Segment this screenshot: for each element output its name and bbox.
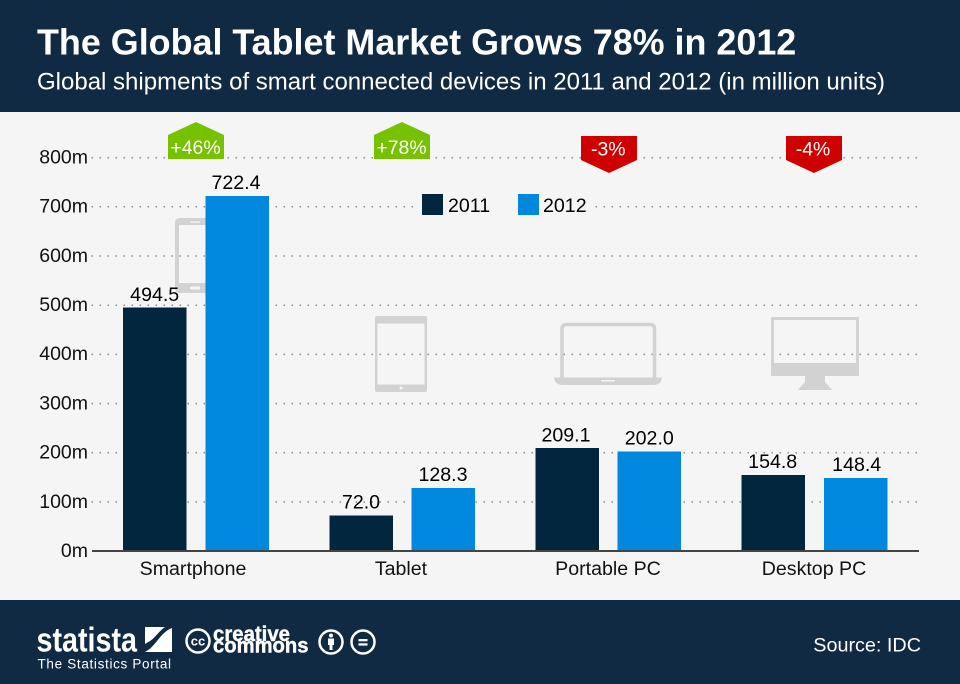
y axis labels: 200m (39, 442, 88, 464)
bar: Desktop PC 2012 (824, 478, 888, 551)
value labels (130, 172, 881, 514)
value labels: 148.4 (832, 454, 881, 476)
bar: Tablet 2012 (412, 488, 475, 551)
value labels: 128.3 (418, 464, 468, 486)
creative commons logo (186, 623, 308, 658)
source: Source: IDC (813, 635, 921, 657)
y axis labels: 800m (39, 146, 88, 168)
y axis labels (39, 146, 88, 562)
icon: cc no derivatives (352, 630, 374, 654)
badge: -3%: -3% (591, 139, 626, 161)
category labels: Smartphone (140, 558, 246, 580)
category labels: Tablet (375, 558, 428, 580)
y axis labels: 500m (39, 294, 88, 316)
statista logo: statista (36, 622, 138, 660)
statista logo: The Statistics Portal (38, 656, 171, 672)
creative commons logo: creative (213, 623, 290, 646)
y axis labels: 600m (39, 245, 88, 267)
value labels: 202.0 (625, 428, 674, 450)
footer band (0, 600, 960, 684)
badge: +46% (168, 122, 224, 159)
value labels: 154.8 (748, 451, 797, 473)
badge: +78%: +78% (376, 137, 427, 159)
badge: -3% (581, 136, 637, 173)
x axis line (92, 550, 919, 552)
y axis labels: 100m (39, 491, 88, 513)
value labels: 209.1 (541, 424, 591, 446)
bar: Portable PC 2011 (536, 448, 599, 551)
creative commons logo: cc (191, 634, 205, 648)
icon: desktop monitor (771, 317, 859, 390)
icon: cc attribution (320, 630, 342, 654)
bar: Smartphone 2012 (206, 196, 269, 551)
category labels: Portable PC (555, 558, 661, 580)
bar: Smartphone 2011 (123, 308, 186, 551)
icon: smartphone (175, 218, 225, 293)
y axis labels: 400m (39, 343, 88, 365)
icon: laptop (554, 324, 662, 385)
header band (0, 0, 960, 112)
legend (419, 190, 593, 220)
y axis labels: 0m (61, 540, 88, 562)
badge: -4%: -4% (796, 139, 830, 161)
value labels: 72.0 (342, 492, 380, 514)
icon: tablet (375, 316, 427, 392)
badge: -4% (786, 136, 842, 173)
y axis labels: 700m (39, 196, 88, 218)
title: The Global Tablet Market Grows 78% in 2012 (37, 22, 796, 62)
category labels (140, 558, 866, 580)
legend: 2011 (448, 195, 490, 217)
value labels: 494.5 (130, 284, 179, 306)
bar: Desktop PC 2011 (742, 475, 805, 551)
y axis labels: 300m (39, 392, 88, 414)
legend: 2012 (543, 195, 587, 217)
bar: Portable PC 2012 (618, 452, 681, 551)
badge: +46%: +46% (170, 137, 221, 159)
bar: Tablet 2011 (330, 516, 393, 551)
subtitle: Global shipments of smart connected devices in 2011 and 2012 (in million units) (37, 68, 885, 96)
creative commons logo: commons (213, 635, 308, 658)
badge: +78% (374, 122, 430, 159)
value labels: 722.4 (211, 172, 261, 194)
category labels: Desktop PC (762, 558, 866, 580)
statista logo (36, 622, 172, 672)
